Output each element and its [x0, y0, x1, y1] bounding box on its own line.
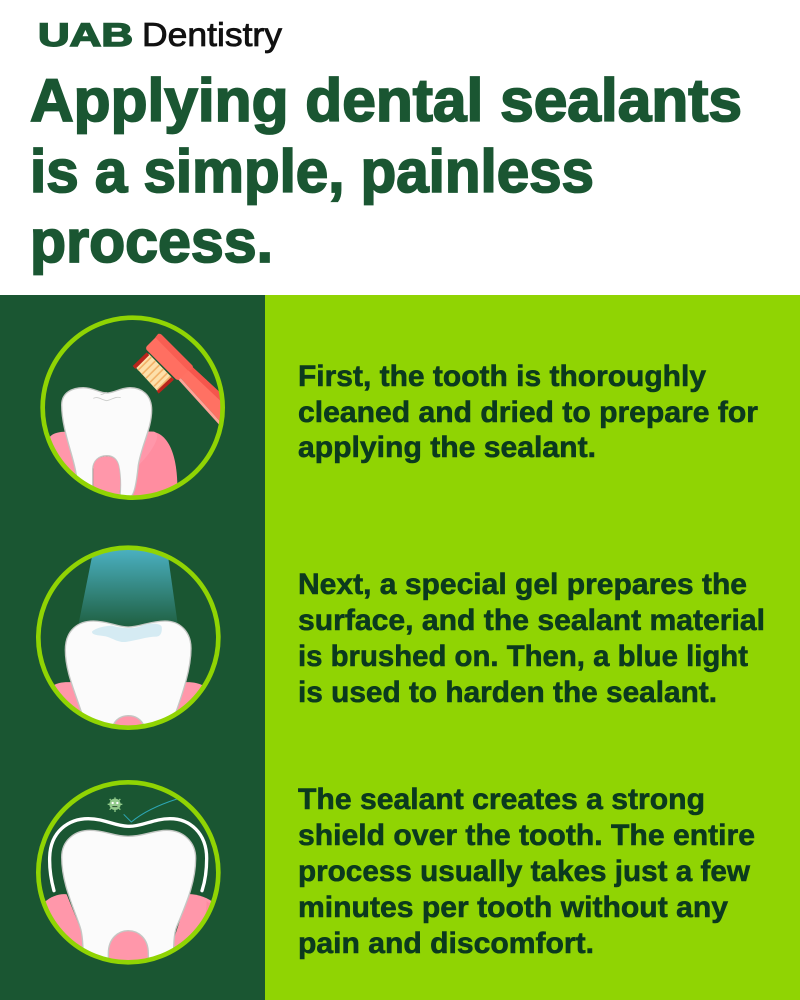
step 2 text — [298, 568, 765, 709]
icon: sealed tooth with shield and germ — [38, 782, 218, 970]
title: is a simple, painless — [30, 138, 594, 205]
title: process. — [30, 208, 273, 275]
title: Applying dental sealants — [30, 67, 742, 134]
step 1 text — [298, 360, 759, 464]
step 3 text: process usually takes just a few — [298, 855, 750, 888]
title — [30, 67, 742, 275]
step 1 text: cleaned and dried to prepare for — [298, 396, 759, 429]
step 2 text: surface, and the sealant material — [298, 604, 765, 637]
step 3 text: minutes per tooth without any — [298, 891, 729, 924]
step 3 text: The sealant creates a strong — [298, 783, 705, 816]
step 3 text: shield over the tooth. The entire — [298, 819, 755, 852]
step 2 text: Next, a special gel prepares the — [298, 568, 747, 601]
panel: icon column — [0, 295, 265, 1000]
logo: Dentistry — [142, 16, 283, 53]
logo: UAB — [38, 17, 133, 53]
step 2 text: is brushed on. Then, a blue light — [298, 640, 748, 673]
icon: blue curing light on tooth — [38, 547, 218, 735]
step 1 text: First, the tooth is thoroughly — [298, 360, 707, 393]
icon: toothbrush cleaning tooth — [43, 318, 230, 505]
step 1 text: applying the sealant. — [298, 431, 596, 464]
step 3 text — [298, 783, 755, 960]
logo — [38, 16, 283, 53]
step 3 text: pain and discomfort. — [298, 927, 594, 960]
panel: text column — [265, 295, 800, 1000]
step 2 text: is used to harden the sealant. — [298, 676, 717, 709]
